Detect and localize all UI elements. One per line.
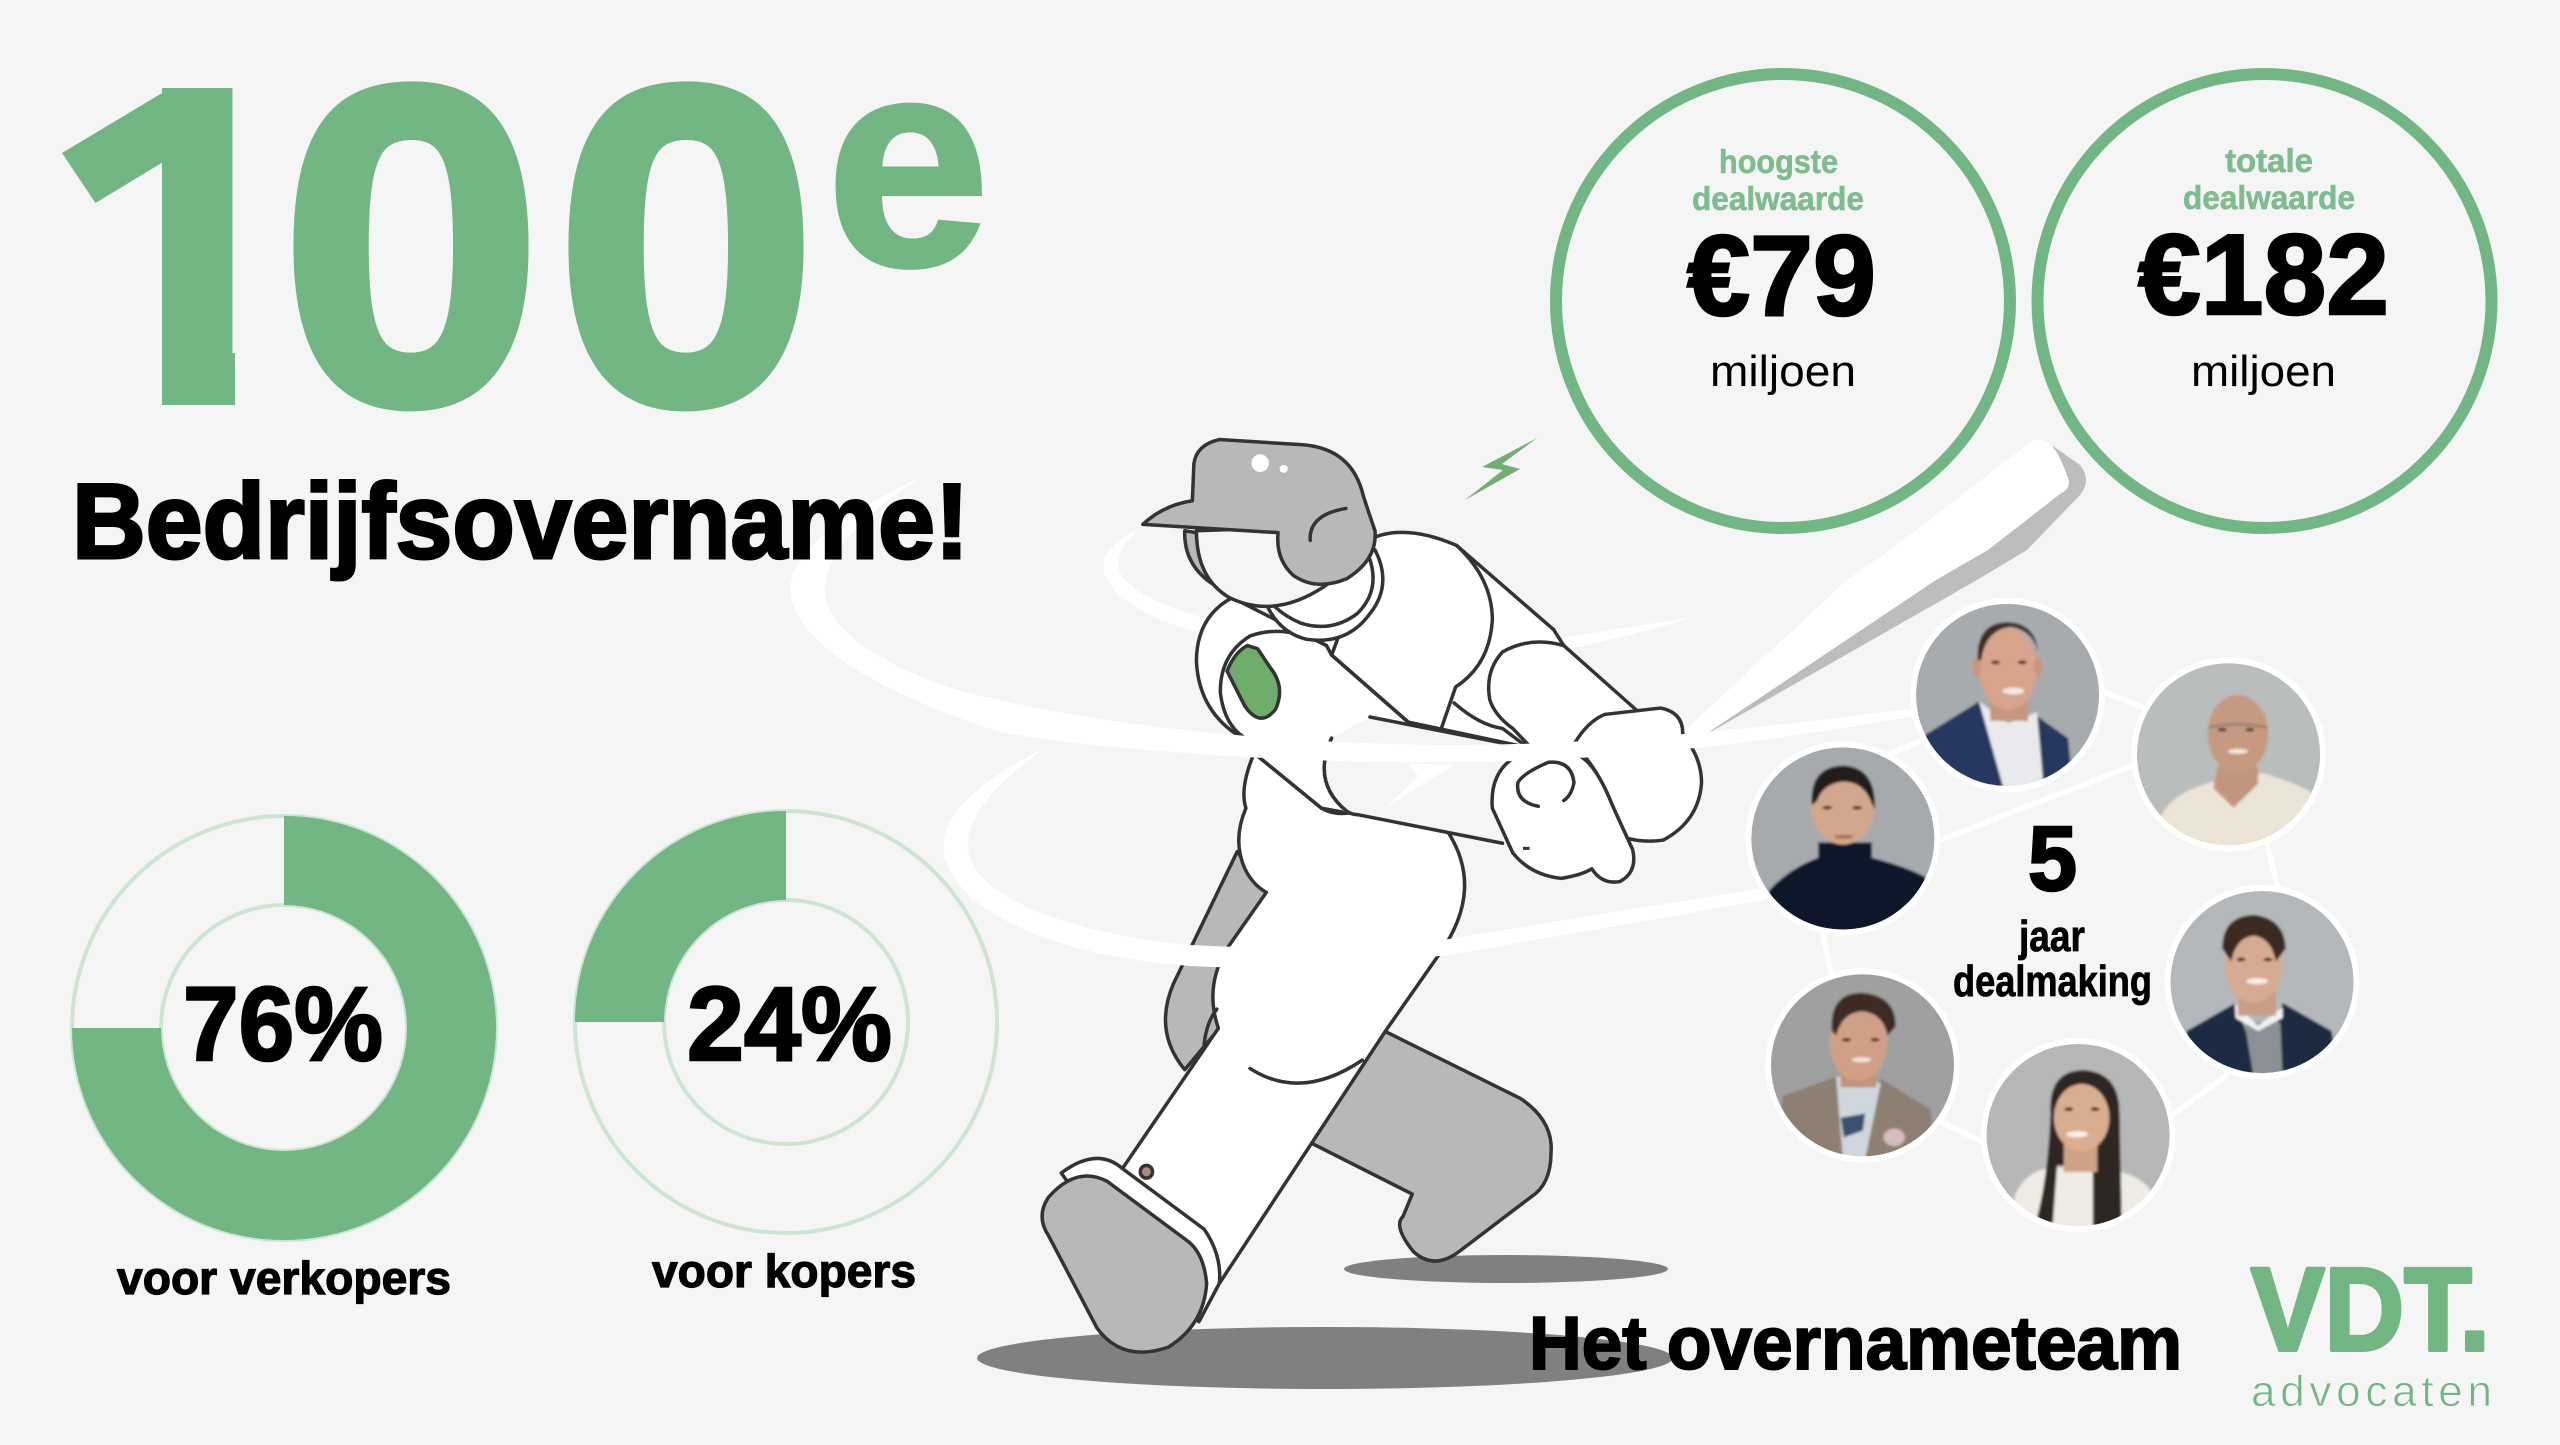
logo: VDT advocaten: VDT. [2251,1244,2490,1376]
front shoe [1042,1176,1207,1352]
head [1185,531,1224,591]
donut chart: 24% voor kopers: voor kopers [652,1245,916,1297]
front foot cuff [1061,1158,1220,1322]
donut chart: 24% voor kopers: 24% [687,966,892,1083]
baseball player figure [1042,440,1702,1352]
team centre label: 5 jaar dealmaking: dealmaking [1953,957,2152,1006]
portrait 5: man in tan blazer and patterned shirt [1765,968,1960,1162]
portrait 2: man in cream shirt with glasses [2131,657,2326,851]
swoosh over player, upper band [790,478,1914,762]
team portraits [1746,597,2359,1233]
upper glove [1492,746,1634,882]
title: 100e: e [826,0,990,329]
donut chart: 76% voor verkopers: voor verkopers [117,1252,451,1304]
white network lines between team photos [1822,691,2279,1145]
donut chart: 76% voor verkopers [72,816,496,1304]
back thigh [1165,852,1266,1070]
white spark on arm [1385,764,1454,808]
team centre label: 5 jaar dealmaking [1953,808,2152,1006]
stat circle: totale dealwaarde [2038,74,2492,528]
back leg [1311,1031,1551,1261]
title: 100e [62,81,982,412]
swoosh behind head [1104,528,1694,662]
near shoulder and sleeve [1196,598,1408,815]
torso and front leg [1122,754,1465,1283]
donut chart: 76% voor verkopers: 76% [183,966,383,1083]
portrait 4: man in navy jacket and grey sweater [2165,885,2359,1079]
flag of the digit one [62,89,175,203]
portrait 6: woman with long dark hair [1981,1038,2175,1233]
title: 100e: 0 [555,0,818,498]
green lightning spark [1465,438,1537,500]
donut chart: 24% voor kopers [575,811,997,1297]
stat circle: hoogste dealwaarde: €79 [1687,213,1876,340]
swoosh over player, lower band [944,748,1765,968]
portrait 1: man in navy blazer [1910,597,2106,792]
heading: Het overnameteam: Het overnameteam [1529,1301,2182,1385]
baseball bat [1680,439,2086,738]
stat circle: totale dealwaarde: dealwaarde [2183,179,2355,216]
stat circle: hoogste dealwaarde: hoogste [1719,143,1838,180]
stat circle: totale dealwaarde: €182 [2138,212,2389,339]
team centre label: 5 jaar dealmaking: jaar [2018,912,2085,961]
lower glove [1574,708,1702,841]
team centre label: 5 jaar dealmaking: 5 [2028,808,2077,910]
heading: Bedrijfsovername!: Bedrijfsovername! [72,461,969,581]
logo: VDT advocaten: advocaten [2251,1367,2492,1416]
collar [1268,550,1383,640]
stat circle: totale dealwaarde: miljoen [2191,347,2336,396]
stat circle: hoogste dealwaarde: dealwaarde [1692,180,1864,217]
ankle dot [1140,1165,1153,1178]
stat circle: hoogste dealwaarde: miljoen [1710,347,1856,396]
portrait 3: man in black turtleneck [1746,741,1940,936]
far arm and shoulder [1332,532,1638,748]
stat circle: totale dealwaarde: totale [2225,142,2313,179]
green sleeve patch [1227,646,1280,718]
ground shadows [977,1255,1673,1389]
title: 100e: 0 [280,0,543,498]
stat circle: hoogste dealwaarde [1556,74,2010,528]
near forearm [1324,717,1526,846]
title: 100e: 1 [57,0,313,503]
helmet [1143,440,1375,584]
